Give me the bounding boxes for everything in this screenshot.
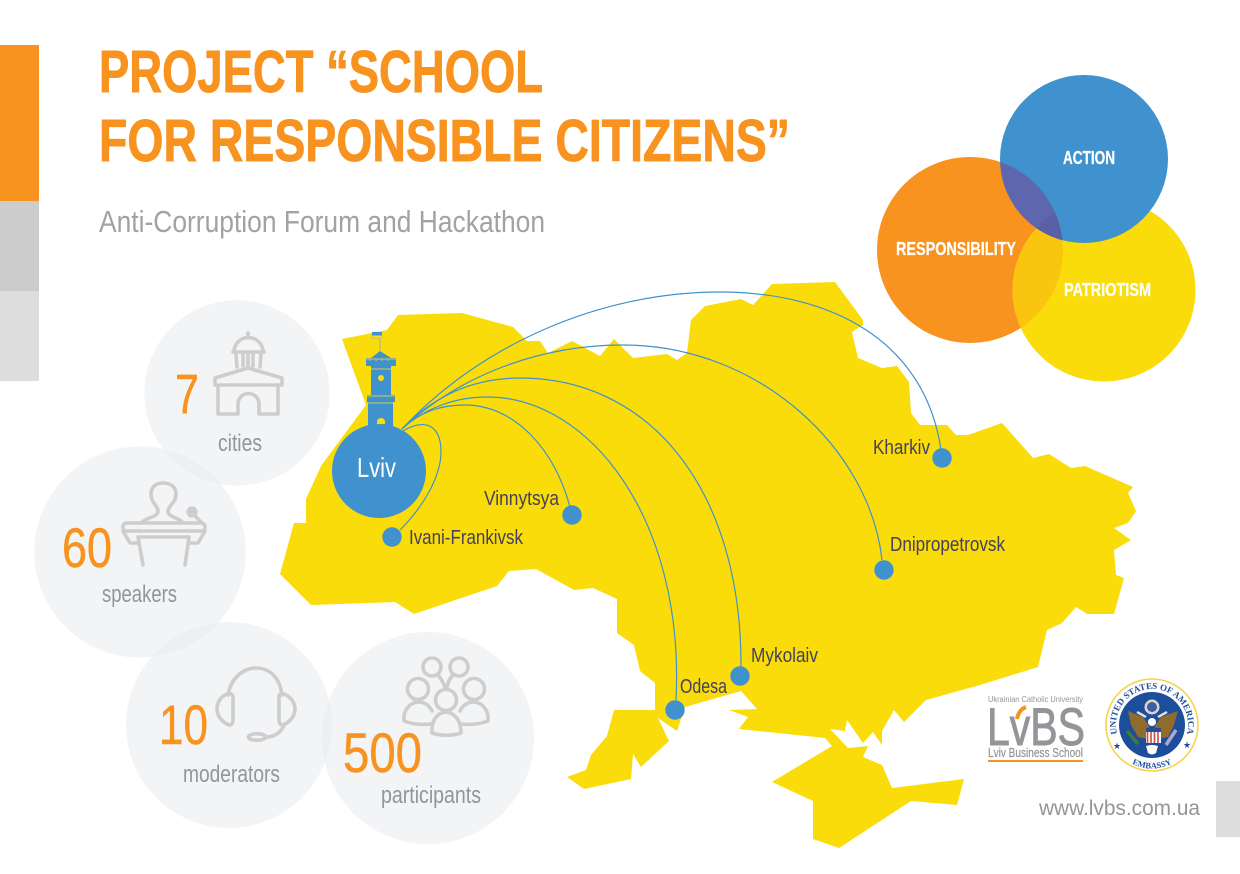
stat: 10 moderators bbox=[126, 622, 332, 828]
logo: US Embassy seal: ★ bbox=[1113, 742, 1121, 752]
stat: 60 speakers bbox=[34, 446, 246, 658]
city: Mykolaiv bbox=[730, 645, 818, 686]
website address: www.lvbs.com.ua bbox=[1038, 797, 1200, 820]
city: Odesa: Odesa bbox=[680, 676, 728, 698]
city: Dnipropetrovsk bbox=[874, 534, 1006, 580]
stat: 10 moderators: 10 bbox=[159, 693, 208, 756]
title: PROJECT “SCHOOL bbox=[99, 39, 543, 105]
icon: group of people bbox=[404, 658, 488, 735]
logo: Lviv Business School: Lviv Business School bbox=[988, 745, 1083, 760]
logo: Lviv Business School: Ukrainian Catholic University bbox=[988, 695, 1083, 704]
title bbox=[99, 39, 790, 174]
logo: Lviv Business School: LvBS bbox=[987, 698, 1085, 757]
logo: US Embassy seal: ★ bbox=[1183, 741, 1191, 751]
stat: 7 cities: 7 bbox=[175, 362, 199, 425]
icon: speaker at lectern bbox=[123, 483, 205, 565]
stat: 7 cities: cities bbox=[218, 430, 262, 457]
city: Kharkiv: Kharkiv bbox=[873, 437, 930, 459]
left colour sidebar bbox=[0, 45, 39, 381]
city: Odesa bbox=[665, 676, 728, 720]
stat: 60 speakers: 60 bbox=[62, 516, 112, 579]
stat: 500 participants bbox=[322, 632, 534, 844]
city: Dnipropetrovsk: Dnipropetrovsk bbox=[890, 534, 1006, 556]
logo: US Embassy seal: EMBASSY bbox=[1132, 758, 1171, 769]
map of Ukraine bbox=[280, 282, 1136, 848]
route arcs from Lviv bbox=[400, 292, 941, 700]
stat: 500 participants: participants bbox=[381, 782, 481, 809]
icon: city hall bbox=[215, 333, 282, 414]
city: Mykolaiv: Mykolaiv bbox=[751, 645, 818, 667]
venn diagram: values: ACTION bbox=[1063, 148, 1115, 168]
Lviv hub circle: Lviv bbox=[357, 452, 396, 483]
logo: US Embassy seal bbox=[1105, 678, 1199, 772]
venn diagram: values: PATRIOTISM bbox=[1064, 280, 1151, 300]
subtitle: Anti-Corruption Forum and Hackathon bbox=[99, 204, 545, 239]
city: Vinnytsya bbox=[484, 488, 582, 525]
bottom-right grey tab bbox=[1216, 781, 1240, 837]
city: Kharkiv bbox=[873, 437, 952, 468]
venn diagram: values: RESPONSIBILITY bbox=[896, 239, 1016, 259]
title: FOR RESPONSIBLE CITIZENS” bbox=[99, 108, 790, 174]
Lviv hub circle bbox=[332, 424, 426, 518]
stat: 10 moderators: moderators bbox=[183, 761, 280, 788]
venn diagram: values bbox=[877, 75, 1196, 382]
city: Ivani-Frankivsk: Ivani-Frankivsk bbox=[409, 527, 524, 549]
logo: US Embassy seal: UNITED STATES OF AMERICA bbox=[1110, 683, 1194, 735]
stat: 7 cities bbox=[144, 300, 330, 486]
stat: 60 speakers: speakers bbox=[102, 581, 177, 608]
stat: 500 participants: 500 bbox=[343, 721, 422, 784]
icon: headset bbox=[217, 668, 295, 740]
icon: Lviv town hall tower bbox=[366, 332, 396, 428]
city: Vinnytsya: Vinnytsya bbox=[484, 488, 560, 510]
